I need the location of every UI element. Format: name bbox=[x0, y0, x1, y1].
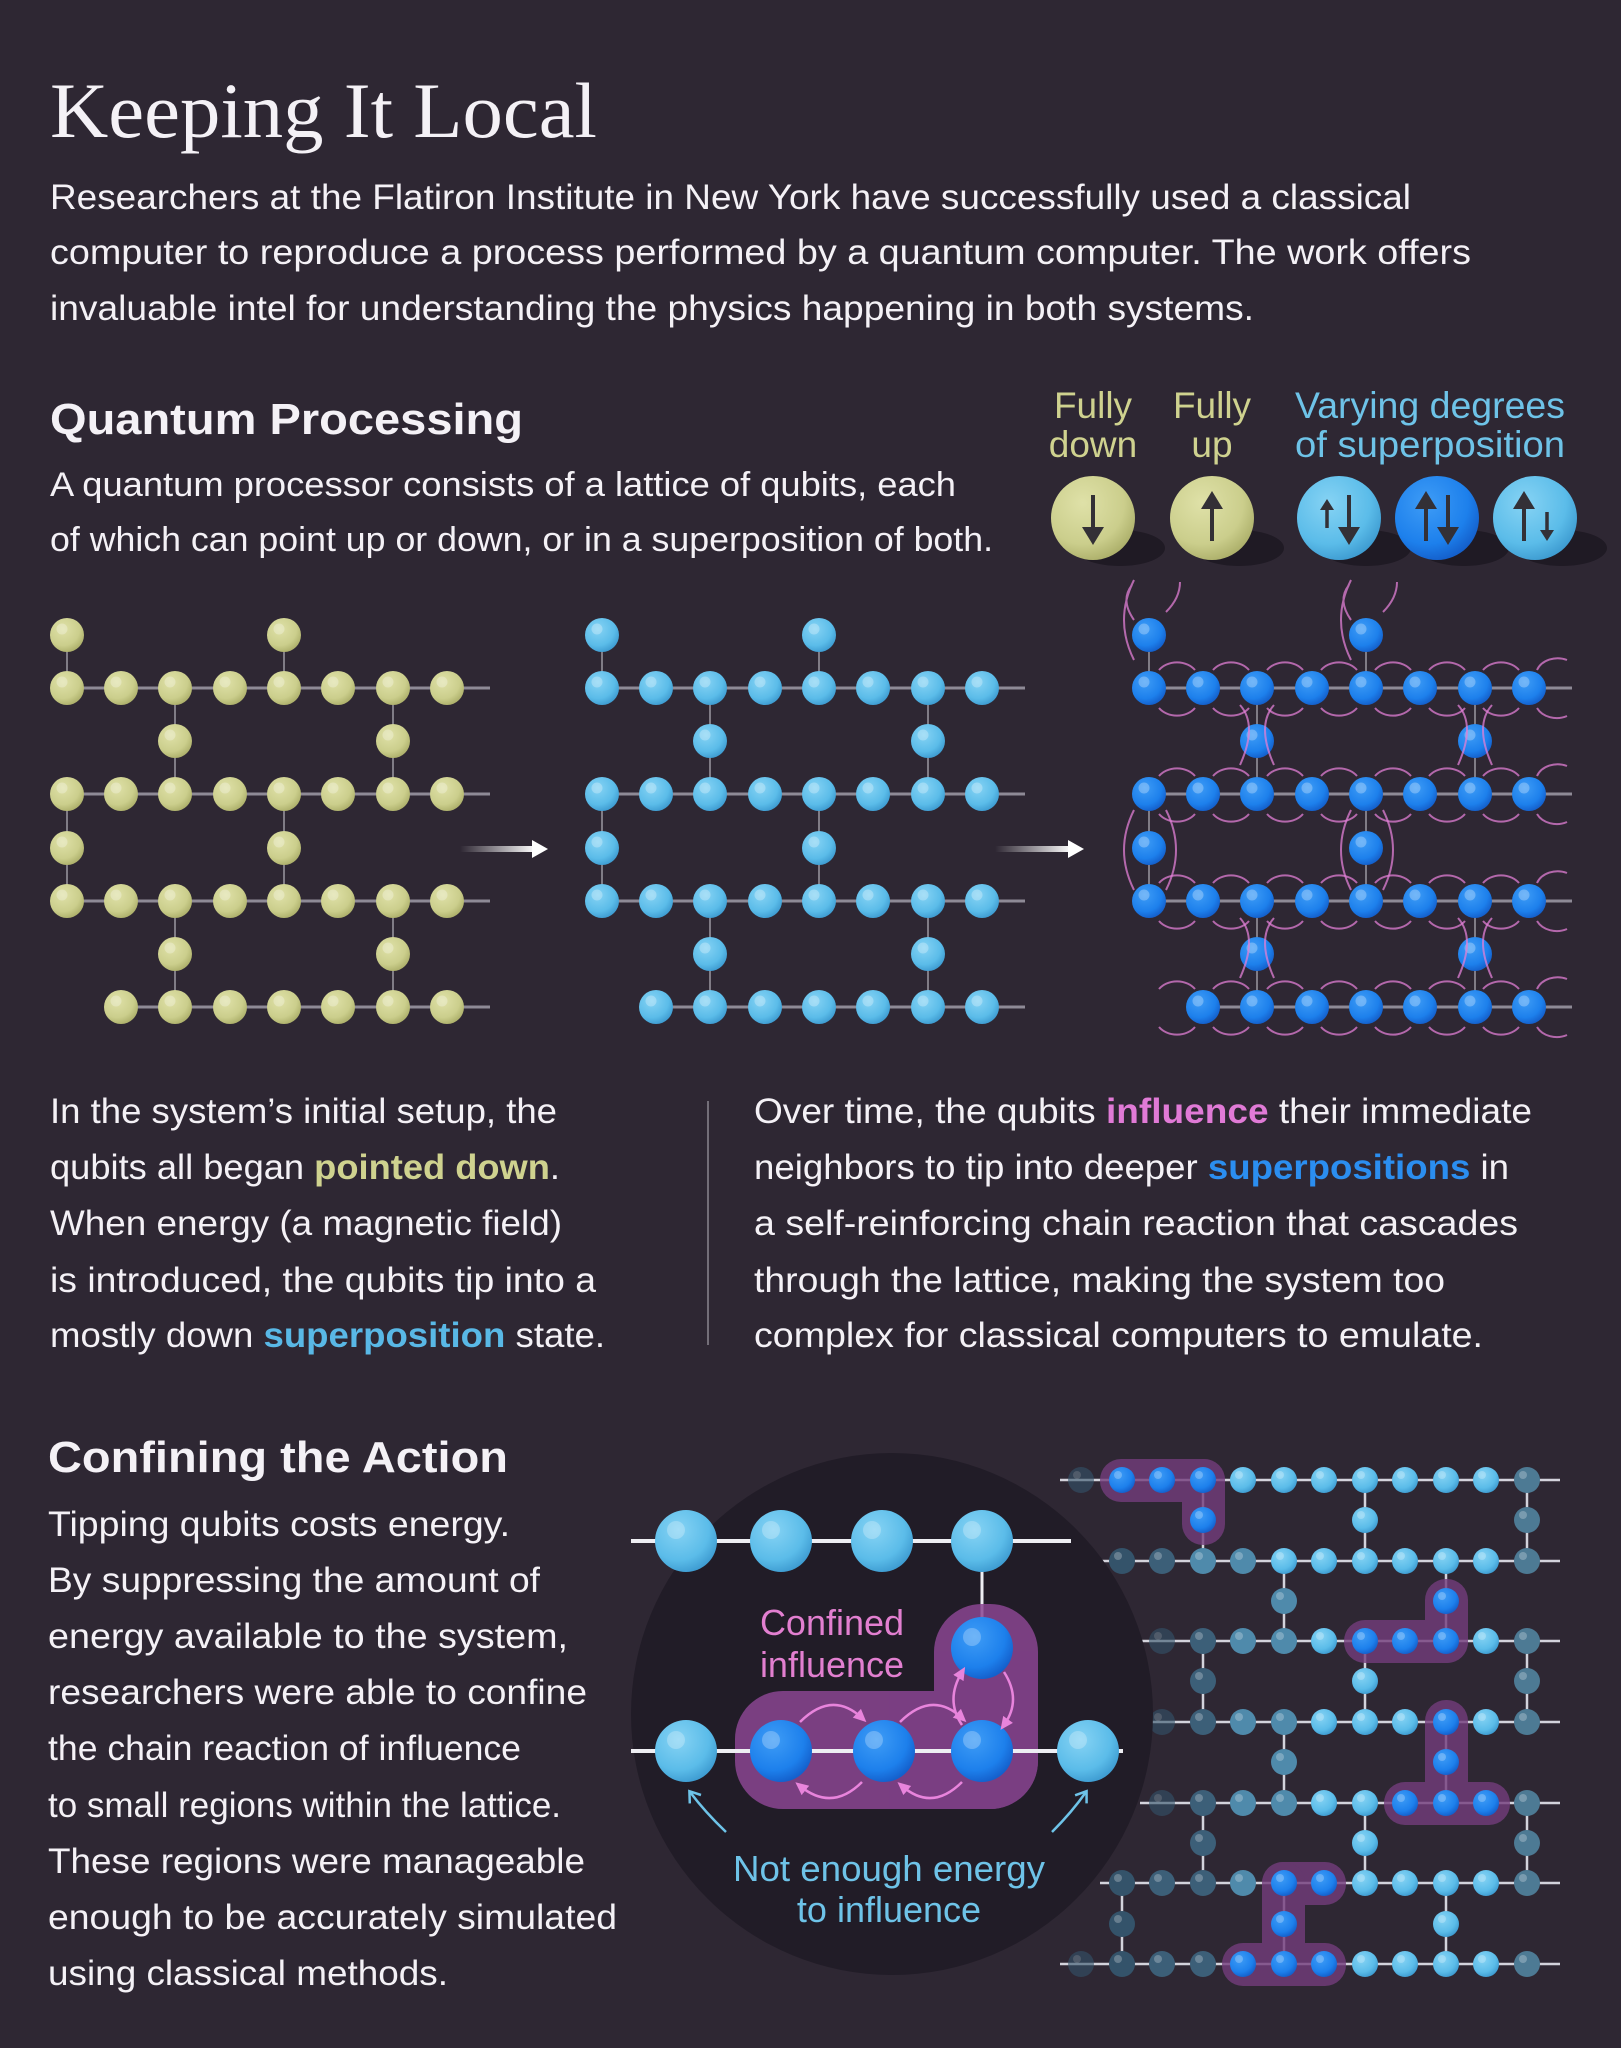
label: confined influence: influence bbox=[760, 1644, 904, 1685]
text: confining description: Tipping qubits costs energy. bbox=[48, 1505, 510, 1544]
text: initial setup: When energy (a magnetic field) bbox=[50, 1204, 562, 1243]
label: not enough energy bbox=[733, 1848, 1045, 1930]
influence arrows bbox=[800, 1672, 1013, 1798]
text: confining description: the chain reaction of influence bbox=[48, 1729, 521, 1768]
lattice 3: deep superposition with influence arrows bbox=[1124, 580, 1572, 1037]
nodes bbox=[1068, 1467, 1540, 1977]
text: confining description: enough to be accurately simulated bbox=[48, 1898, 617, 1937]
confined influence region bbox=[735, 1604, 1038, 1809]
callout qubits bbox=[655, 1510, 1119, 1782]
icon: fully up bbox=[1170, 476, 1254, 560]
quantum processing description bbox=[50, 466, 993, 559]
legend labels: up bbox=[1191, 424, 1233, 465]
legend labels: of superposition bbox=[1295, 424, 1565, 465]
legend labels bbox=[1049, 385, 1565, 465]
lattice 1: all down (green) bbox=[50, 618, 490, 1024]
text: confining description: energy available to the system, bbox=[48, 1617, 568, 1656]
text: chain reaction: Over time, the qubits influence their immediate bbox=[754, 1092, 1532, 1131]
intro paragraph: invaluable intel for understanding the physics happening in both systems. bbox=[50, 289, 1254, 328]
label: not enough energy: Not enough energy bbox=[733, 1848, 1045, 1889]
text: confining description: to small regions within the lattice. bbox=[48, 1786, 561, 1825]
label: confined influence bbox=[760, 1602, 904, 1685]
text: confining description bbox=[48, 1505, 617, 1993]
text: initial setup: qubits all began pointed down. bbox=[50, 1148, 560, 1187]
text: chain reaction bbox=[754, 1092, 1532, 1355]
text: initial setup: mostly down superposition state. bbox=[50, 1316, 605, 1355]
heading: Confining the Action: Confining the Action bbox=[48, 1433, 508, 1482]
intro paragraph: Researchers at the Flatiron Institute in New York have successfully used a classical bbox=[50, 178, 1411, 217]
legend labels: down bbox=[1049, 424, 1137, 465]
arrow 2 bbox=[995, 840, 1084, 858]
text: initial setup: In the system’s initial setup, the bbox=[50, 1092, 557, 1131]
icon: fully down bbox=[1051, 476, 1135, 560]
intro paragraph bbox=[50, 178, 1471, 328]
right lattice with confined regions bbox=[1060, 1459, 1560, 1986]
lattice 2: mostly down superposition (light blue) bbox=[585, 618, 1025, 1024]
text: chain reaction: complex for classical computers to emulate. bbox=[754, 1316, 1483, 1355]
text: confining description: By suppressing the amount of bbox=[48, 1561, 540, 1600]
intro paragraph: computer to reproduce a process performed by a quantum computer. The work offers bbox=[50, 233, 1471, 272]
legend labels: Varying degrees bbox=[1295, 385, 1565, 426]
heading: Quantum Processing: Quantum Processing bbox=[50, 395, 523, 444]
text: confining description: These regions were manageable bbox=[48, 1842, 585, 1881]
label: confined influence: Confined bbox=[760, 1602, 904, 1643]
legend shadows bbox=[1075, 530, 1607, 566]
legend labels: Fully bbox=[1173, 385, 1252, 426]
text: chain reaction: a self-reinforcing chain reaction that cascades bbox=[754, 1204, 1518, 1243]
title: Keeping It Local bbox=[50, 67, 597, 154]
icon: equal superposition bbox=[1395, 476, 1479, 560]
legend bbox=[1049, 385, 1607, 566]
influence arcs bbox=[1124, 580, 1567, 1037]
icon: superposition mostly up bbox=[1493, 476, 1577, 560]
label: not enough energy: to influence bbox=[797, 1889, 981, 1930]
confined regions bbox=[1100, 1459, 1510, 1986]
text: chain reaction: through the lattice, making the system too bbox=[754, 1261, 1445, 1300]
callout lattice lines bbox=[631, 1541, 1123, 1751]
text: confining description: researchers were able to confine bbox=[48, 1673, 587, 1712]
legend labels: Fully bbox=[1054, 385, 1133, 426]
text: initial setup bbox=[50, 1092, 605, 1355]
quantum processing description: of which can point up or down, or in a superposition of both. bbox=[50, 521, 993, 559]
not enough energy arrows bbox=[690, 1792, 1086, 1832]
quantum processing description: A quantum processor consists of a lattice of qubits, each bbox=[50, 466, 956, 504]
text: initial setup: is introduced, the qubits tip into a bbox=[50, 1261, 597, 1300]
text: confining description: using classical methods. bbox=[48, 1954, 448, 1993]
arrow 1 bbox=[460, 840, 548, 858]
icon: superposition mostly down bbox=[1297, 476, 1381, 560]
zoomed callout circle bbox=[631, 1453, 1153, 1975]
text: chain reaction: neighbors to tip into deeper superpositions in bbox=[754, 1148, 1509, 1187]
